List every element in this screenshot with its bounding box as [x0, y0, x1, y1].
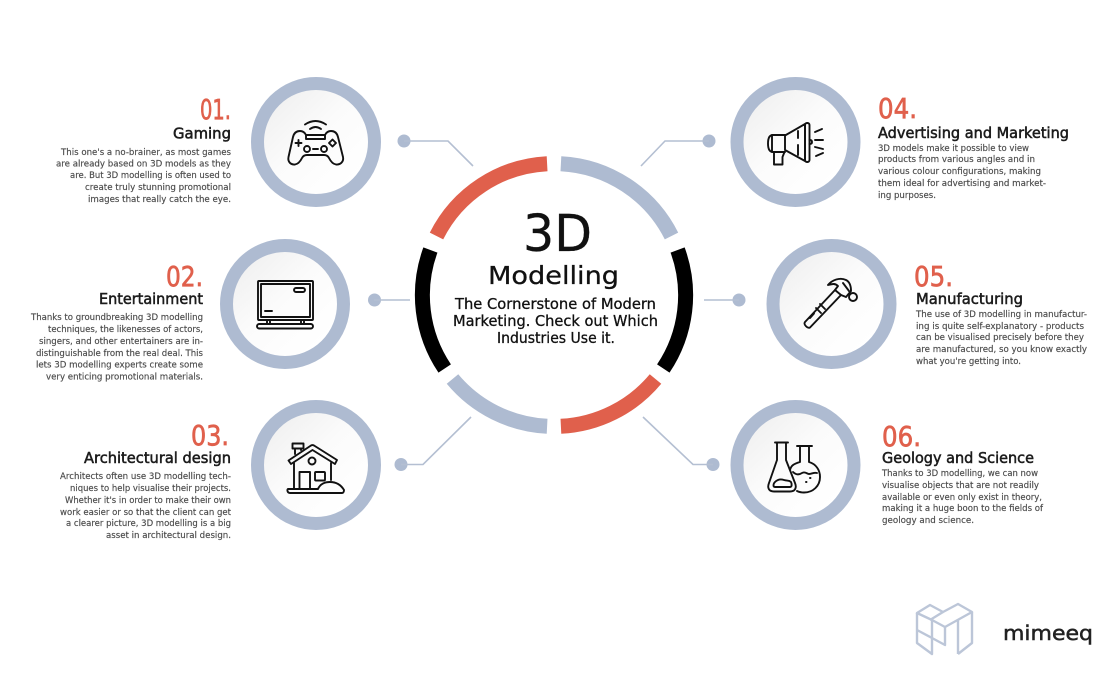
heading: Manufacturing: Manufacturing	[916, 290, 1023, 308]
body text 05: ing is quite self-explanatory - products	[916, 321, 1084, 332]
item 03	[60, 419, 231, 541]
number 05: 05.	[914, 260, 953, 293]
body text 04	[878, 143, 1046, 201]
body text 02: singers, and other entertainers are in-	[39, 336, 203, 347]
connector 02	[368, 294, 410, 306]
number 03: 03.	[191, 419, 229, 452]
body text 02: Thanks to groundbreaking 3D modelling	[30, 312, 203, 323]
central ring	[422, 164, 686, 426]
icon: game controller	[288, 121, 343, 165]
number 02: 02.	[166, 260, 203, 293]
item 01	[56, 93, 232, 205]
connector 05	[704, 294, 746, 306]
circle 06	[737, 406, 854, 524]
central title: Marketing. Check out Which	[453, 312, 658, 330]
body text 05: what you're getting into.	[916, 356, 1021, 367]
central title: Industries Use it.	[497, 329, 615, 347]
body text 03: a clearer picture, 3D modelling is a big	[66, 518, 231, 529]
body text 01: This one's a no-brainer, as most games	[60, 147, 231, 158]
circle 01	[258, 84, 374, 200]
body text 06	[881, 468, 1044, 526]
body text 06: visualise objects that are not readily	[882, 480, 1040, 491]
central title: The Cornerstone of Modern	[454, 295, 656, 313]
body text 04: ing purposes.	[878, 190, 936, 201]
icon: house	[287, 444, 344, 493]
circle 02	[226, 246, 344, 362]
body text 04: various colour configurations, making	[878, 166, 1041, 177]
connector 06	[643, 417, 720, 471]
item 05	[914, 260, 1088, 367]
body text 06: geology and science.	[882, 515, 974, 526]
logo text: mimeeq	[1003, 621, 1093, 645]
central title: 3D	[523, 205, 592, 264]
body text 05: are manufactured, so you know exactly	[916, 344, 1088, 355]
body text 01: images that really catch the eye.	[88, 194, 231, 205]
circle 03	[258, 406, 374, 524]
heading: Advertising and Marketing: Advertising and Marketing	[878, 124, 1069, 142]
body text 03: niques to help visualise their projects.	[70, 483, 231, 494]
item 06	[881, 420, 1044, 526]
icon: hammer	[805, 279, 857, 328]
heading: Entertainment: Entertainment	[99, 290, 203, 308]
body text 05: The use of 3D modelling in manufactur-	[915, 309, 1087, 320]
body text 03: work easier or so that the client can get	[60, 507, 231, 518]
body text 03: asset in architectural design.	[106, 530, 231, 541]
body text 05: can be visualised precisely before they	[916, 332, 1085, 343]
logo icon	[917, 604, 972, 654]
number 01: 01.	[200, 93, 231, 126]
icon: flasks	[768, 442, 820, 492]
body text 06: Thanks to 3D modelling, we can now	[881, 468, 1038, 479]
body text 02: distinguishable from the real deal. This	[36, 348, 203, 359]
body text 05	[915, 309, 1088, 367]
body text 04: 3D models make it possible to view	[878, 143, 1029, 154]
body text 03	[60, 471, 231, 541]
icon: screen	[257, 281, 313, 328]
heading: Geology and Science: Geology and Science	[882, 449, 1034, 467]
central title: Modelling	[488, 261, 619, 290]
body text 01: are. But 3D modelling is often used to	[70, 170, 231, 181]
circle 04	[737, 84, 854, 200]
body text 03: Architects often use 3D modelling tech-	[60, 471, 231, 482]
body text 03: Whether it's in order to make their own	[65, 495, 231, 506]
body text 02: very enticing promotional materials.	[46, 372, 203, 382]
body text 06: making it a huge boon to the fields of	[882, 503, 1044, 514]
body text 02: techniques, the likenesses of actors,	[48, 324, 203, 335]
body text 01	[56, 147, 232, 205]
connector 03	[394, 417, 471, 471]
body text 02	[30, 312, 203, 382]
body text 04: them ideal for advertising and market-	[878, 178, 1046, 189]
connector 01	[398, 134, 473, 166]
number 06: 06.	[882, 420, 921, 453]
body text 04: products from various angles and in	[878, 154, 1035, 165]
circle 05	[773, 246, 890, 362]
item 04	[878, 92, 1069, 201]
connector 04	[641, 134, 716, 166]
item 02	[30, 260, 203, 382]
heading: Gaming: Gaming	[173, 124, 231, 142]
heading: Architectural design: Architectural design	[84, 449, 231, 467]
body text 06: available or even only exist in theory,	[882, 492, 1042, 503]
number 04: 04.	[878, 92, 917, 125]
icon: megaphone	[768, 123, 823, 164]
central title	[453, 205, 658, 347]
body text 01: create truly stunning promotional	[85, 182, 231, 193]
body text 02: lets 3D modelling experts create some	[36, 360, 203, 370]
body text 01: are already based on 3D models as they	[56, 158, 232, 170]
